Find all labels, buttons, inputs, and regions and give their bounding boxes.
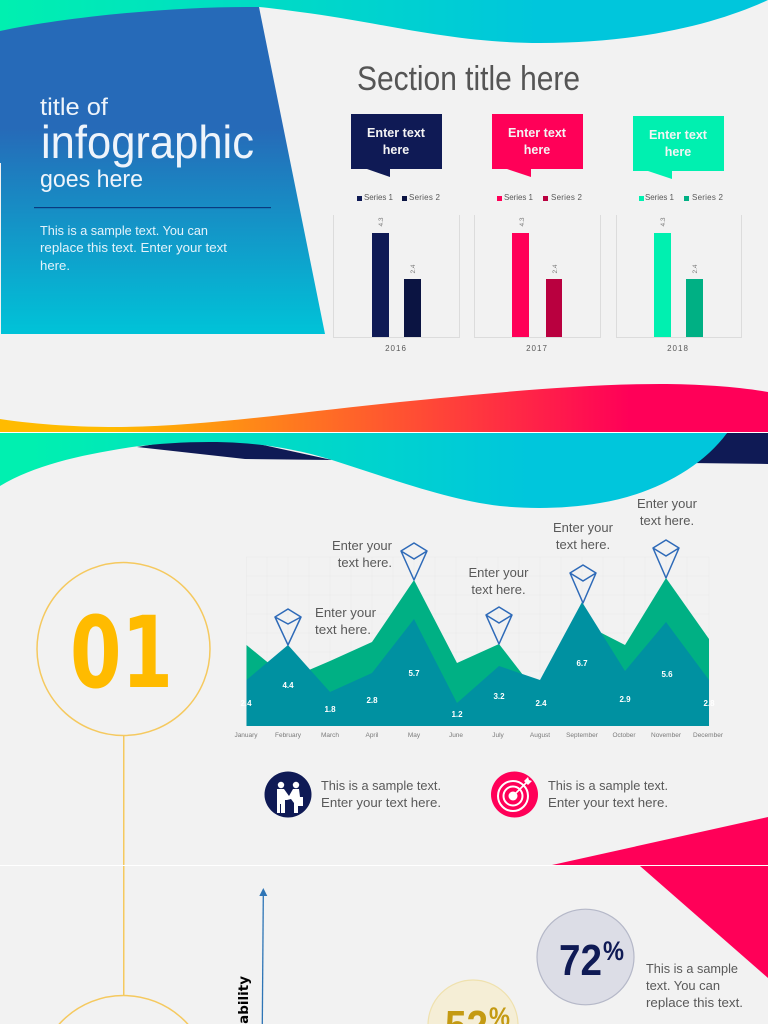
bubble 72%: % bbox=[603, 936, 624, 966]
bar chart: 2017: 2017 bbox=[526, 344, 548, 353]
chart annotations: Enter your bbox=[332, 538, 393, 553]
chart annotations: Enter your bbox=[637, 496, 698, 511]
data labels: 6.7 bbox=[576, 659, 588, 668]
chart annotations: text here. bbox=[471, 582, 526, 597]
icon: handshake bbox=[264, 772, 312, 818]
data labels: 2.4 bbox=[240, 699, 252, 708]
icon: diamond pins bbox=[275, 540, 679, 645]
bar chart: 2016: 4.3 bbox=[378, 217, 385, 227]
bar chart: 2016: 2016 bbox=[385, 344, 407, 353]
data labels: 1.8 bbox=[324, 705, 336, 714]
legend: 2016 bbox=[357, 193, 441, 202]
callout: navy: Enter text bbox=[367, 126, 426, 140]
month axis: February bbox=[275, 732, 302, 739]
text: handshake caption: Enter your text here. bbox=[321, 795, 441, 810]
bubble 72%: 72 bbox=[559, 936, 602, 985]
title: infographic bbox=[41, 116, 254, 168]
intro text: This is a sample text. You can bbox=[40, 224, 208, 238]
callout: navy bbox=[351, 114, 442, 177]
bar chart: 2018 bbox=[616, 215, 742, 353]
month axis: January bbox=[234, 732, 258, 739]
legend: 2017 bbox=[497, 193, 583, 202]
legend: 2018: Series 1 bbox=[645, 193, 675, 202]
bubble 72% bbox=[537, 909, 634, 1005]
bar chart: 2018: 2.4 bbox=[692, 264, 699, 274]
data labels: 5.6 bbox=[661, 670, 673, 679]
text: 72% caption: text. You can bbox=[646, 978, 720, 993]
text: target caption: This is a sample text. bbox=[548, 778, 668, 793]
legend: 2016: Series 2 bbox=[409, 193, 441, 202]
data labels: 1.2 bbox=[451, 710, 463, 719]
bar chart: 2017: 2.4 bbox=[552, 264, 559, 274]
month axis: November bbox=[651, 732, 682, 739]
chart annotations: text here. bbox=[556, 537, 610, 552]
callout: green: Enter text bbox=[649, 128, 708, 142]
text: 72% caption bbox=[646, 961, 743, 1010]
legend: 2017: Series 1 bbox=[504, 193, 534, 202]
callout: pink: Enter text bbox=[508, 126, 567, 140]
pink shard lower bbox=[640, 866, 768, 978]
chart annotations: text here. bbox=[640, 513, 694, 528]
data labels: 5.7 bbox=[408, 669, 420, 678]
month axis: April bbox=[365, 732, 379, 739]
legend: 2017: Series 2 bbox=[551, 193, 583, 202]
panel: 2016 column bbox=[334, 114, 460, 353]
bar chart: 2018: 2018 bbox=[667, 344, 689, 353]
bottom wave bbox=[0, 384, 768, 432]
bar chart: 2016 bbox=[334, 215, 460, 353]
number badge 02 circle bbox=[37, 996, 210, 1024]
data labels bbox=[240, 659, 715, 719]
month axis: October bbox=[612, 732, 636, 739]
callout: pink: here bbox=[524, 143, 550, 157]
axis arrow bbox=[259, 888, 267, 1024]
month axis bbox=[234, 732, 724, 739]
text: target caption: Enter your text here. bbox=[548, 795, 668, 810]
data labels: 4.4 bbox=[282, 681, 294, 690]
chart annotations: Enter your bbox=[553, 520, 614, 535]
callout: green: here bbox=[665, 145, 691, 159]
section heading: Section title here bbox=[357, 60, 580, 98]
month axis: December bbox=[693, 732, 724, 739]
callout: navy: here bbox=[383, 143, 409, 157]
bar chart: 2017: 4.3 bbox=[519, 217, 526, 227]
month axis: March bbox=[321, 732, 339, 739]
month axis: July bbox=[492, 732, 505, 739]
bubble 52% bbox=[428, 980, 518, 1024]
legend: 2018 bbox=[639, 193, 724, 202]
text: handshake caption bbox=[321, 778, 441, 810]
panel: 2017 column bbox=[474, 114, 600, 353]
intro text bbox=[40, 224, 228, 273]
data labels: 2.9 bbox=[619, 695, 631, 704]
second wave bbox=[0, 433, 727, 508]
pink shard upper bbox=[552, 817, 768, 865]
bar chart: 2017 bbox=[474, 215, 600, 353]
chart annotations: Enter your bbox=[315, 605, 377, 620]
data labels: 2.8 bbox=[703, 699, 715, 708]
panel: 2018 column bbox=[616, 116, 742, 353]
month axis: June bbox=[449, 732, 463, 739]
bar chart: 2018: 4.3 bbox=[660, 217, 667, 227]
panel: title block bbox=[0, 7, 325, 334]
navy accent shapes bbox=[137, 433, 768, 464]
chart annotations: Enter your bbox=[469, 565, 529, 580]
number badge 01 bbox=[37, 562, 210, 736]
data labels: 3.2 bbox=[493, 692, 505, 701]
area chart bbox=[234, 496, 724, 739]
title: title of bbox=[40, 94, 108, 121]
legend: 2018: Series 2 bbox=[692, 193, 724, 202]
title: goes here bbox=[40, 166, 143, 193]
icon: target bbox=[491, 772, 538, 818]
callout: green bbox=[633, 116, 724, 179]
top wave bbox=[0, 0, 768, 43]
text: target caption bbox=[548, 778, 668, 810]
month axis: August bbox=[530, 732, 550, 739]
data labels: 2.4 bbox=[535, 699, 547, 708]
intro text: replace this text. Enter your text bbox=[40, 241, 228, 255]
text: 72% caption: replace this text. bbox=[646, 995, 743, 1010]
chart annotations: text here. bbox=[315, 622, 371, 637]
legend: 2016: Series 1 bbox=[364, 193, 394, 202]
intro text: here. bbox=[40, 259, 70, 273]
month axis: May bbox=[408, 732, 421, 739]
chart annotations bbox=[315, 496, 698, 637]
number badge 01: 01 bbox=[70, 596, 173, 711]
data labels: 2.8 bbox=[366, 696, 378, 705]
text: handshake caption: This is a sample text. bbox=[321, 778, 441, 793]
callout: pink bbox=[492, 114, 583, 177]
title bbox=[40, 94, 254, 193]
chart annotations: text here. bbox=[338, 555, 392, 570]
bar chart: 2016: 2.4 bbox=[410, 264, 417, 274]
text: 72% caption: This is a sample bbox=[646, 961, 738, 976]
month axis: September bbox=[566, 732, 599, 739]
